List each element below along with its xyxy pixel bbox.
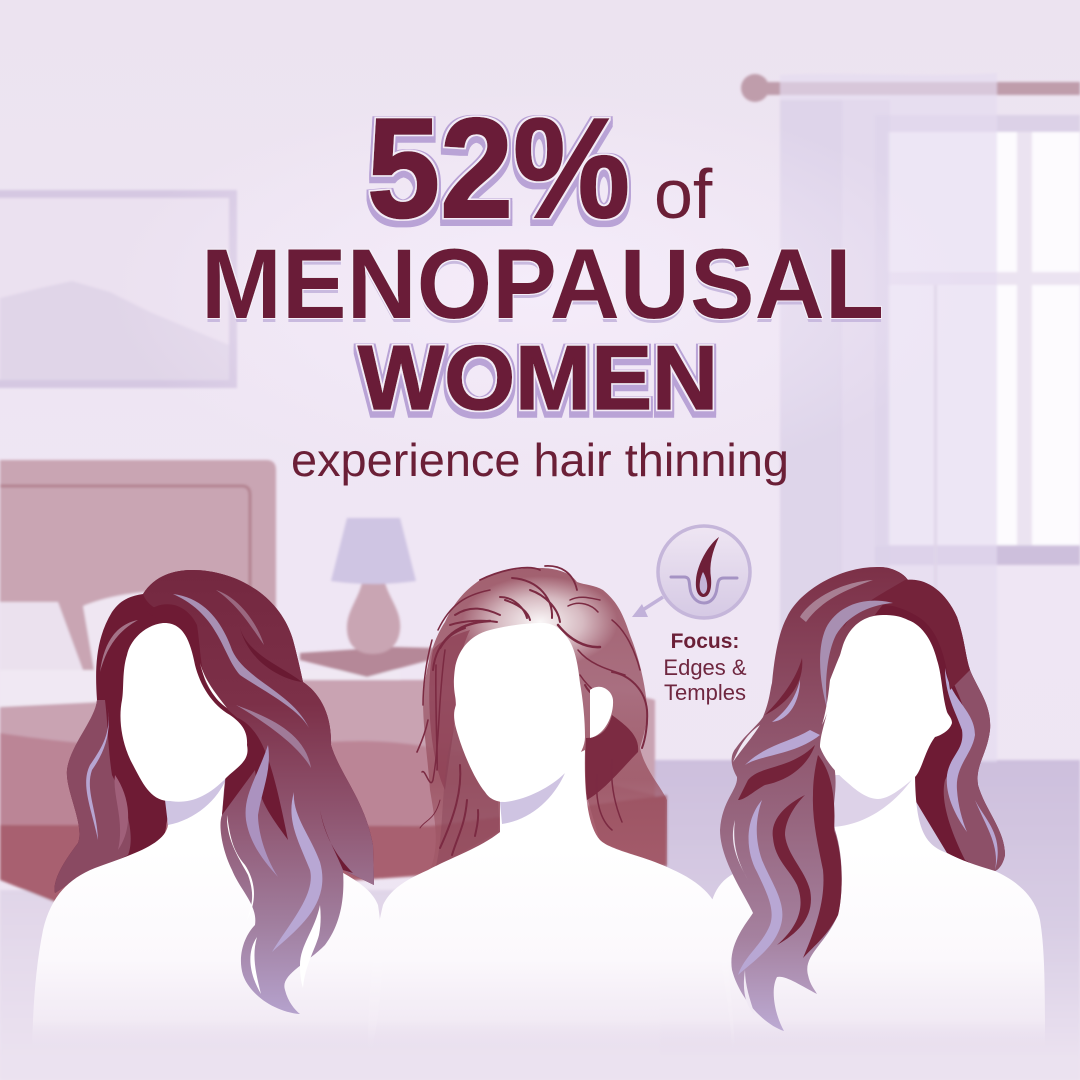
crown thin highlight xyxy=(800,580,873,622)
night table xyxy=(300,647,435,677)
arrow to hairline xyxy=(632,597,663,617)
face xyxy=(820,615,952,799)
white gap strands xyxy=(200,663,321,994)
lavender highlights xyxy=(772,680,800,722)
picture frame xyxy=(0,194,233,384)
subtitle: experience hair thinning xyxy=(291,434,789,486)
face xyxy=(120,623,248,801)
hair strands xyxy=(417,566,647,855)
statistic: 52%: 52% xyxy=(367,89,630,248)
highlight band xyxy=(236,705,311,768)
dark strand left xyxy=(115,775,128,850)
hair back xyxy=(55,570,374,893)
hair strand xyxy=(696,537,719,597)
bedding xyxy=(0,670,667,902)
window xyxy=(875,115,1080,565)
lock left of neck xyxy=(436,725,500,866)
thin hair mass xyxy=(423,568,667,870)
floor xyxy=(0,760,1080,1080)
pale edges xyxy=(733,725,760,1015)
neck shadow xyxy=(833,775,915,827)
hair left lock xyxy=(55,700,131,893)
dark lock beside neck xyxy=(803,755,842,958)
pillows xyxy=(0,592,170,670)
main highlight xyxy=(173,594,309,728)
face xyxy=(454,623,585,802)
dark shading beside jaw xyxy=(222,718,288,840)
word: of: of xyxy=(654,155,713,233)
hair front xyxy=(720,567,907,1031)
callout: focus on edges and temples xyxy=(632,526,750,705)
hair right outer lock xyxy=(944,617,1005,871)
highlight left xyxy=(86,705,109,840)
title block xyxy=(201,89,884,486)
ear xyxy=(590,687,613,738)
lavender highlight inner xyxy=(246,745,278,877)
lamp shade xyxy=(331,518,416,584)
figure: woman with full hair, right xyxy=(711,567,1045,1050)
right lavender highlights xyxy=(945,668,998,870)
curtain xyxy=(780,73,997,762)
heading: MENOPAUSAL: MENOPAUSAL xyxy=(201,228,884,339)
crown wide highlight xyxy=(820,601,893,712)
hair back xyxy=(840,567,1005,871)
second dark lock xyxy=(773,795,811,945)
callout label: Focus: xyxy=(671,630,739,653)
dark shading around face xyxy=(147,604,205,682)
white gap by face xyxy=(822,618,868,725)
neck shadow and body xyxy=(368,750,735,1050)
soft light behind title xyxy=(110,90,970,490)
hair bulb xyxy=(700,572,707,594)
headboard xyxy=(0,460,276,740)
dark lock below ear xyxy=(585,715,638,800)
lamp base xyxy=(347,583,400,654)
dark strands xyxy=(738,658,815,800)
figure: woman with full hair, left xyxy=(32,570,382,1050)
crown thinning highlight xyxy=(466,578,614,660)
highlight temple xyxy=(100,620,138,672)
dark streak right xyxy=(320,810,353,873)
figure: woman with thinning hair, center xyxy=(368,566,735,1050)
heading: WOMEN: WOMEN xyxy=(358,328,718,429)
curtain rod xyxy=(741,74,1080,102)
long lavender highlight xyxy=(272,792,322,952)
main lavender lock xyxy=(738,800,782,975)
hair front xyxy=(143,570,374,1014)
dark streak xyxy=(240,628,302,682)
callout detail line 2: Temples xyxy=(664,680,746,705)
temple highlight xyxy=(918,609,958,660)
neck shadow and body xyxy=(32,770,382,1050)
dark crown xyxy=(843,580,970,690)
follicle pocket xyxy=(671,577,737,603)
body xyxy=(711,770,1045,1050)
callout detail line 1: Edges & xyxy=(663,655,747,680)
icon: hair follicle xyxy=(658,526,750,618)
highlight top xyxy=(216,590,264,645)
dark side of hair xyxy=(429,630,470,790)
